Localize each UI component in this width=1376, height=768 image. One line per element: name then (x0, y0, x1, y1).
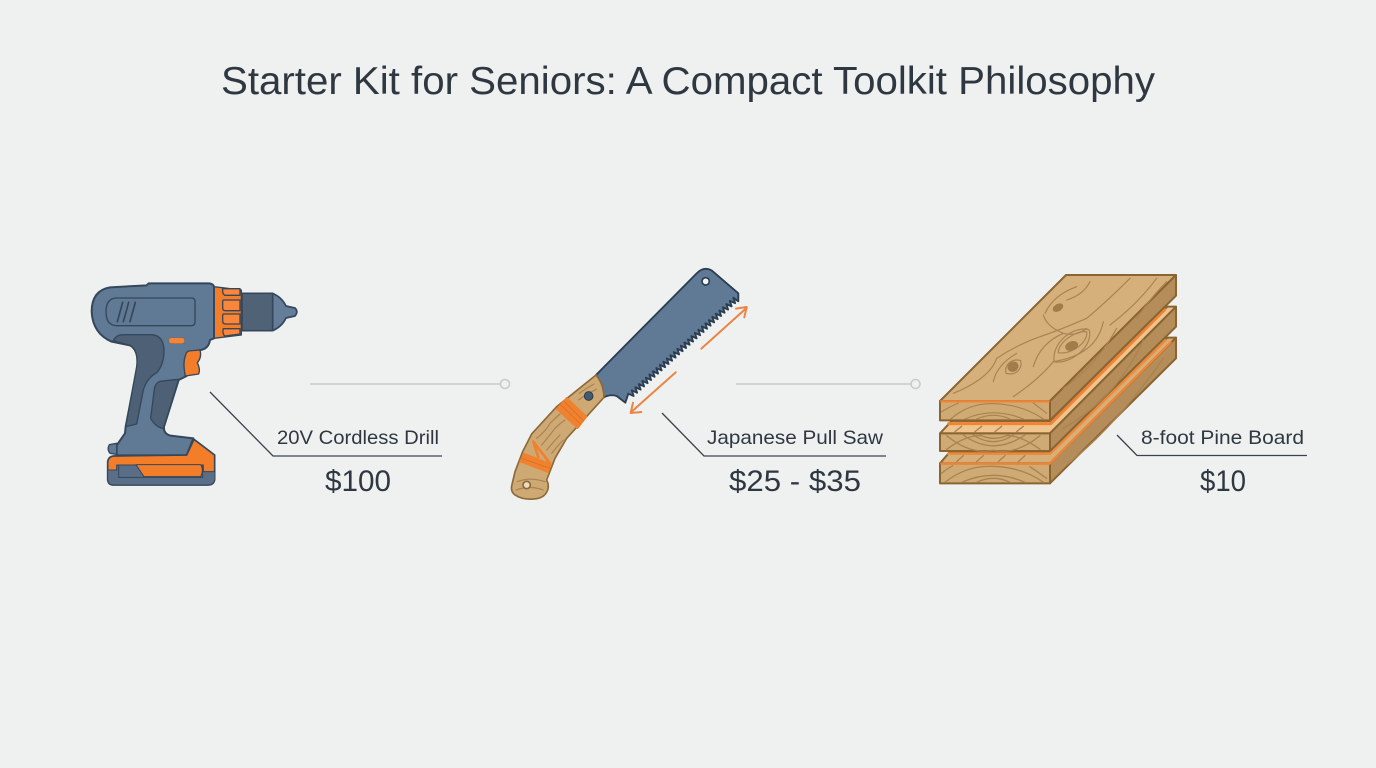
drill orange collar (214, 287, 241, 338)
saw handle (511, 375, 604, 499)
drill body (92, 283, 214, 455)
drill trigger (184, 350, 201, 376)
bottom board grain (941, 358, 1163, 482)
drill vents (117, 302, 135, 322)
board leader line (1117, 435, 1307, 456)
connector: drill to saw (310, 380, 510, 388)
middle board (940, 307, 1176, 451)
drill label: 20V Cordless Drill (277, 427, 439, 449)
icon: stacked pine boards (940, 275, 1176, 483)
saw label: Japanese Pull Saw (707, 427, 884, 449)
saw blade hole (702, 278, 709, 285)
middle board orange edge (949, 310, 1165, 424)
drill side panel (106, 298, 195, 326)
drill leader line (210, 392, 442, 456)
saw handle pin (523, 481, 530, 489)
arrow: pull direction down (631, 372, 676, 413)
top board knots (1006, 302, 1080, 374)
middle board top grain (955, 426, 1023, 432)
drill chuck (242, 293, 297, 331)
icon: cordless drill (92, 283, 297, 485)
saw price: $25 - $35 (729, 465, 861, 498)
title: Starter Kit for Seniors: A Compact Toolkit Philosophy (221, 60, 1156, 103)
saw handle grain (516, 384, 597, 490)
top board grain (942, 278, 1167, 419)
connector: saw to board (736, 380, 920, 388)
saw rivet (584, 392, 593, 400)
drill battery (108, 439, 215, 485)
saw leader line (662, 413, 886, 456)
top board orange edge (941, 398, 1049, 405)
saw orange wrap lower (520, 442, 551, 472)
saw orange wrap upper (557, 398, 587, 428)
board label: 8-foot Pine Board (1141, 427, 1304, 449)
saw blade (596, 269, 738, 403)
top board (940, 275, 1176, 420)
bottom board orange edge (941, 342, 1171, 464)
middle board end grain (947, 340, 1143, 451)
board price: $10 (1200, 465, 1246, 498)
bottom board (940, 338, 1176, 483)
arrow: push direction up (701, 307, 747, 349)
icon: Japanese pull saw (511, 269, 747, 499)
drill switch (169, 338, 185, 344)
drill price: $100 (325, 465, 391, 498)
drill dark grip (113, 335, 164, 427)
